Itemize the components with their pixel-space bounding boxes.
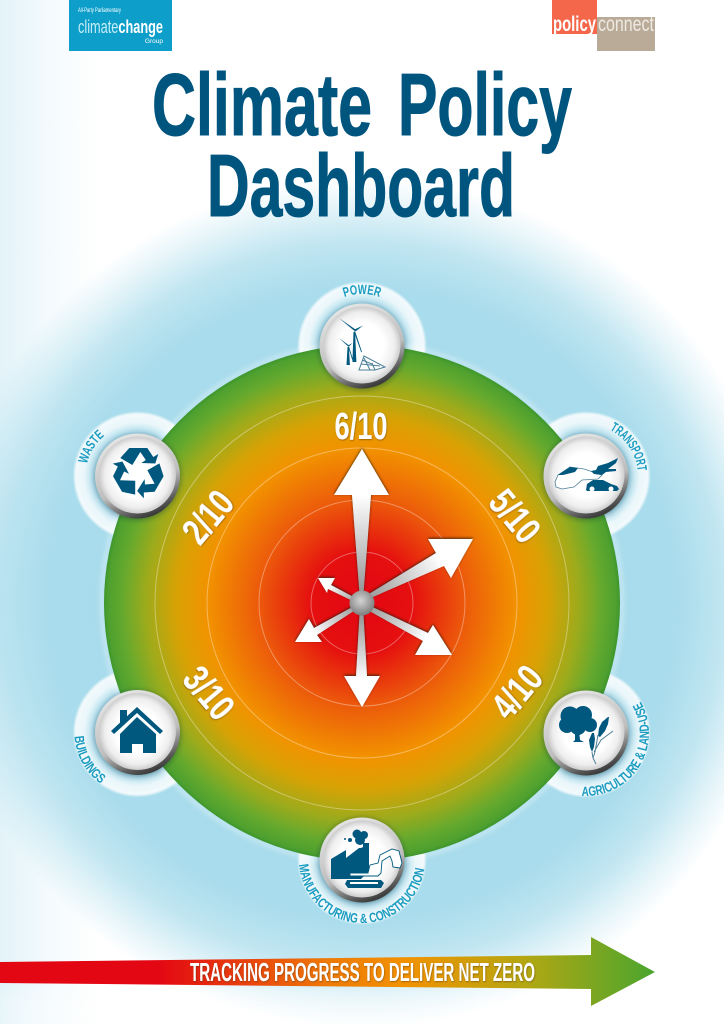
logo: policy connect <box>552 0 655 51</box>
logo: policy connect: policy <box>553 13 596 36</box>
logo: climate change group <box>69 0 172 51</box>
label: manufacturing and construction: MANUFACTURING & CONSTRUCTION <box>299 864 424 924</box>
arrow: power <box>334 449 389 600</box>
arrow: waste <box>318 578 361 604</box>
label: power: POWER <box>342 284 382 297</box>
arrow: agriculture <box>364 604 452 655</box>
label: buildings: BUILDINGS <box>74 736 106 783</box>
score: agriculture 4/10: 4/10 <box>484 658 552 728</box>
title: Policy <box>398 55 572 154</box>
icon: wind turbines and solar panel <box>339 318 385 370</box>
sector: power <box>316 284 408 393</box>
score: transport 5/10: 5/10 <box>480 482 548 552</box>
logo: climate change group: All-Party Parliamentary <box>78 7 121 14</box>
sector: manufacturing and construction <box>299 815 424 924</box>
icon: recycling <box>108 448 168 501</box>
title: Dashboard <box>207 136 515 235</box>
score: power 6/10: 6/10 <box>334 406 388 448</box>
title: Climate <box>152 55 372 154</box>
sector: waste <box>78 429 184 523</box>
arrow: buildings <box>295 604 360 642</box>
sector: transport <box>540 422 647 523</box>
icon: house <box>111 707 163 753</box>
arrow: transport <box>364 539 473 600</box>
score: waste 2/10: 2/10 <box>175 483 243 553</box>
halo: sector rings <box>72 281 651 925</box>
label: waste: WASTE <box>78 429 104 462</box>
icon: tree and wheat <box>559 706 613 764</box>
label: agriculture and land use: AGRICULTURE & LAND-USE <box>582 702 650 796</box>
dial hub <box>350 590 374 616</box>
sector: buildings <box>74 688 184 783</box>
score: manufacturing and buildings 3/10: 3/10 <box>174 659 242 729</box>
dial <box>104 345 620 861</box>
arrow: manufacturing <box>344 606 380 707</box>
logo: climate change group: climatechange <box>78 17 163 37</box>
banner arrow <box>0 937 655 1006</box>
sector: agriculture and land use <box>540 688 650 796</box>
logo: policy connect: connect <box>598 13 654 36</box>
icon: plane, train and car <box>555 458 619 492</box>
logo: climate change group: Group <box>145 38 163 45</box>
icon: factory and excavator <box>331 830 402 888</box>
label: transport: TRANSPORT <box>612 422 647 470</box>
title <box>152 55 572 235</box>
